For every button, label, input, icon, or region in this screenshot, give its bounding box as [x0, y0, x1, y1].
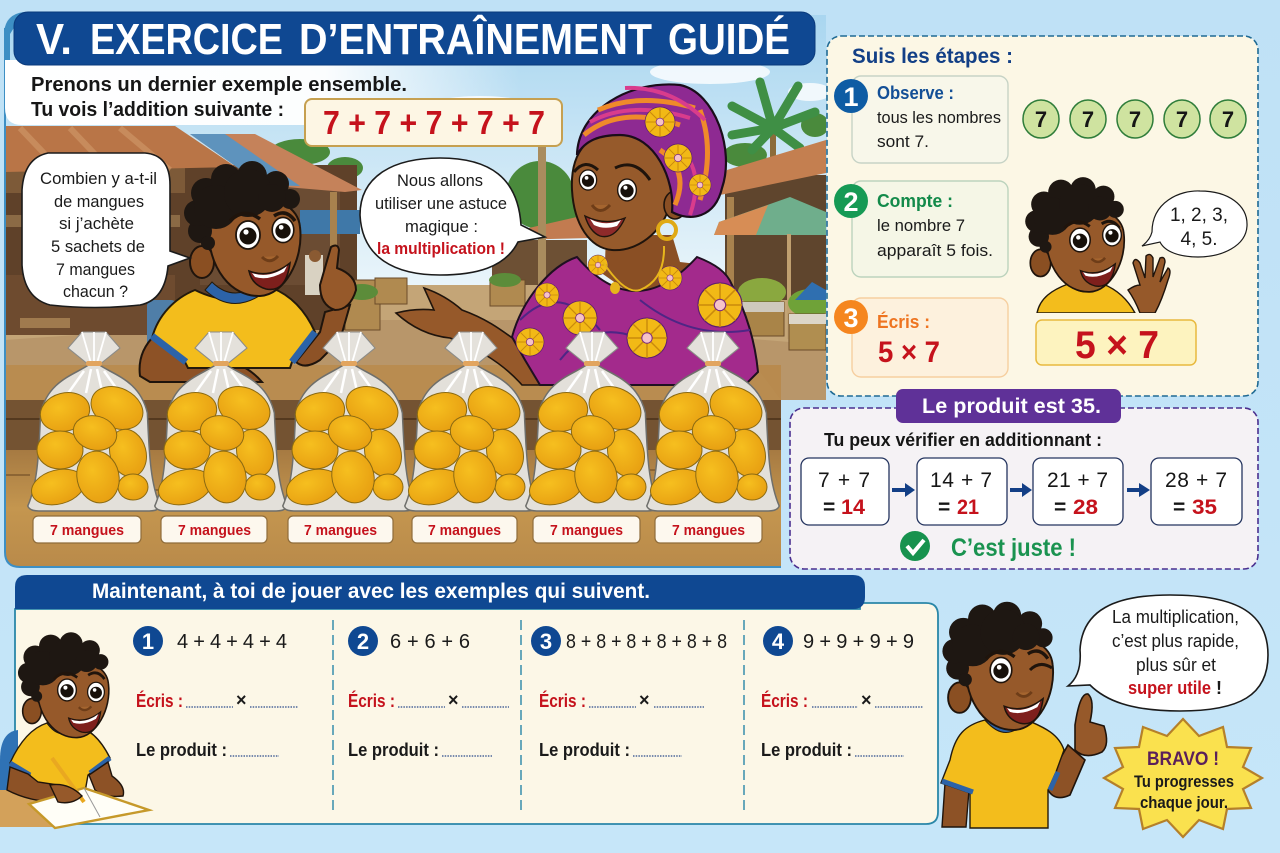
- scene: right market stall: [714, 140, 832, 350]
- exercise 3: Écris :: [539, 690, 586, 711]
- five sevens: 7: [1129, 107, 1141, 132]
- five sevens: [1023, 100, 1246, 138]
- scene: middle stalls: [489, 146, 590, 306]
- scene outline: [5, 28, 781, 567]
- result box 5 x 7: [1036, 320, 1196, 367]
- exercise 1: 1: [142, 629, 154, 654]
- exercise 2: ×: [448, 690, 459, 710]
- exercise 2: [348, 626, 509, 760]
- exercise 3: Le produit :: [539, 740, 630, 760]
- step 1: observe: [834, 76, 1008, 163]
- addition step boxes: 14: [841, 496, 865, 519]
- exercise 3: [531, 626, 727, 760]
- boy thumbs up: [941, 602, 1107, 828]
- speech bubble: encouragement: c’est plus rapide,: [1112, 631, 1239, 651]
- boy counting on fingers: [1025, 177, 1170, 313]
- exercise 3: ×: [639, 690, 650, 710]
- product heading: [896, 389, 1121, 423]
- step 2: count: [834, 181, 1008, 277]
- speech bubble: teacher explanation: utiliser une astuce: [375, 194, 507, 213]
- addition step boxes: =: [1173, 496, 1185, 519]
- exercise 3: 3: [540, 629, 552, 654]
- intro text: Tu vois l’addition suivante :: [31, 99, 284, 121]
- addition step boxes: =: [823, 496, 835, 519]
- speech bubble: boy question: 5 sachets de: [51, 237, 145, 256]
- exercise 1: 4 + 4 + 4 + 4: [177, 631, 287, 653]
- scene: background trees: [270, 113, 829, 237]
- five sevens: 7: [1035, 107, 1047, 132]
- speech bubble: encouragement: plus sûr et: [1136, 655, 1216, 675]
- counting speech bubble: 4, 5.: [1181, 229, 1217, 250]
- exercise 2: Écris :: [348, 690, 395, 711]
- speech bubble: boy question: si j’achète: [59, 214, 134, 233]
- scene: palm tree: [732, 82, 815, 157]
- steps heading: Suis les étapes :: [852, 45, 1013, 68]
- speech bubble: encouragement: [1068, 595, 1268, 711]
- speech bubble: boy question: 7 mangues: [56, 260, 135, 279]
- scene: woman: [396, 84, 758, 385]
- bag labels: 7 mangues: [672, 522, 745, 539]
- addition step boxes: [801, 458, 1242, 525]
- bravo starburst: BRAVO !: [1147, 749, 1219, 770]
- step 1: observe: sont 7.: [877, 132, 929, 151]
- step 1: observe: Observe :: [877, 83, 954, 103]
- arrows between steps: [892, 483, 1150, 497]
- verify instruction: Tu peux vérifier en additionnant :: [824, 429, 1102, 450]
- mango bags: [28, 332, 779, 511]
- step 3: write: 3: [843, 303, 859, 333]
- speech bubble: teacher explanation: magique :: [405, 217, 478, 236]
- step 3: write: 5 × 7: [878, 336, 940, 369]
- scene: table: [5, 365, 781, 567]
- addition step boxes: 28: [1073, 496, 1098, 519]
- title banner: V.: [36, 15, 72, 64]
- speech bubble: boy question: de mangues: [54, 192, 144, 211]
- bag labels: 7 mangues: [428, 522, 501, 539]
- practice header: [15, 575, 865, 609]
- speech bubble: encouragement: !: [1216, 678, 1222, 698]
- exercise 4: 9 + 9 + 9 + 9: [803, 631, 914, 653]
- addition step boxes: 21: [957, 496, 979, 519]
- speech bubble: encouragement: super utile: [1128, 678, 1211, 698]
- speech bubble: teacher explanation: la multiplication !: [377, 239, 505, 258]
- exercise 1: Écris :: [136, 690, 183, 711]
- five sevens: 7: [1082, 107, 1094, 132]
- scene: boy in yellow shirt: [140, 161, 356, 382]
- step 1: observe: 1: [843, 82, 859, 112]
- exercise 4: [761, 626, 923, 760]
- addition step boxes: =: [938, 496, 950, 519]
- bag labels: [33, 516, 762, 543]
- exercise 1: [133, 626, 298, 760]
- step 3: write: Écris :: [877, 311, 930, 332]
- addition step boxes: 28 + 7: [1165, 469, 1227, 492]
- addition box: 7 + 7 + 7 + 7 + 7: [323, 104, 545, 141]
- five sevens: 7: [1222, 107, 1234, 132]
- exercise 2: Le produit :: [348, 740, 439, 760]
- addition step boxes: 14 + 7: [930, 469, 992, 492]
- exercise 4: 4: [772, 629, 785, 654]
- exercise 3: 8 + 8 + 8 + 8 + 8 + 8: [566, 631, 727, 653]
- exercise 4: Le produit :: [761, 740, 852, 760]
- bag labels: 7 mangues: [178, 522, 251, 539]
- addition step boxes: 7 + 7: [818, 469, 870, 492]
- speech bubble: boy question: chacun ?: [63, 282, 128, 301]
- bravo starburst: Tu progresses: [1134, 772, 1234, 791]
- intro text: Prenons un dernier exemple ensemble.: [31, 74, 407, 96]
- result box 5 x 7: 5 × 7: [1075, 324, 1159, 367]
- bag labels: 7 mangues: [304, 522, 377, 539]
- correct confirmation: C’est juste !: [951, 534, 1076, 562]
- speech bubble: encouragement: La multiplication,: [1112, 607, 1239, 627]
- intro text: [31, 74, 407, 121]
- addition step boxes: =: [1054, 496, 1066, 519]
- step 2: count: 2: [843, 187, 859, 217]
- title banner: GUIDÉ: [668, 14, 790, 64]
- practice header: Maintenant, à toi de jouer avec les exemples qui suivent.: [92, 580, 650, 603]
- bravo starburst: chaque jour.: [1140, 793, 1228, 812]
- scene: sky: [5, 15, 826, 305]
- step 2: count: le nombre 7: [877, 216, 965, 235]
- exercise 1: ×: [236, 690, 247, 710]
- scene: left market stall: [5, 126, 407, 335]
- counting speech bubble: [1142, 191, 1247, 257]
- panel: market scene: [5, 15, 832, 567]
- addition step boxes: 21 + 7: [1047, 469, 1108, 492]
- title banner: [4, 12, 815, 65]
- bag labels: 7 mangues: [550, 522, 623, 539]
- exercise 2: 6 + 6 + 6: [390, 631, 470, 653]
- intro text backing: [5, 60, 520, 125]
- addition step boxes: 35: [1192, 496, 1217, 519]
- counting speech bubble: 1, 2, 3,: [1170, 205, 1228, 226]
- speech bubble: boy question: Combien y a-t-il: [40, 169, 157, 188]
- bravo starburst: [1104, 719, 1262, 837]
- step 1: observe: tous les nombres: [877, 108, 1001, 127]
- scene: ground: [6, 285, 826, 342]
- five sevens: 7: [1176, 107, 1188, 132]
- step 2: count: apparaît 5 fois.: [877, 241, 993, 260]
- step 2: count: Compte :: [877, 191, 953, 211]
- exercise 4: Écris :: [761, 690, 808, 711]
- panel: practice exercises: [15, 575, 938, 824]
- speech bubble: teacher explanation: Nous allons: [397, 171, 483, 190]
- exercise 2: 2: [357, 629, 369, 654]
- exercise 1: Le produit :: [136, 740, 227, 760]
- exercise 4: ×: [861, 690, 872, 710]
- title banner: EXERCICE: [90, 15, 283, 64]
- speech bubble: teacher explanation: [360, 158, 545, 275]
- bag labels: 7 mangues: [50, 522, 124, 539]
- panel: product check: [790, 389, 1258, 569]
- step 3: write: [834, 298, 1008, 377]
- panel: steps: [827, 36, 1258, 396]
- boy writing in notebook: [0, 632, 149, 828]
- correct confirmation: [900, 531, 1076, 562]
- speech bubble: boy question: [22, 153, 190, 308]
- title banner: D’ENTRAÎNEMENT: [299, 14, 652, 64]
- product heading: Le produit est 35.: [922, 395, 1101, 418]
- scene: clouds: [450, 66, 826, 101]
